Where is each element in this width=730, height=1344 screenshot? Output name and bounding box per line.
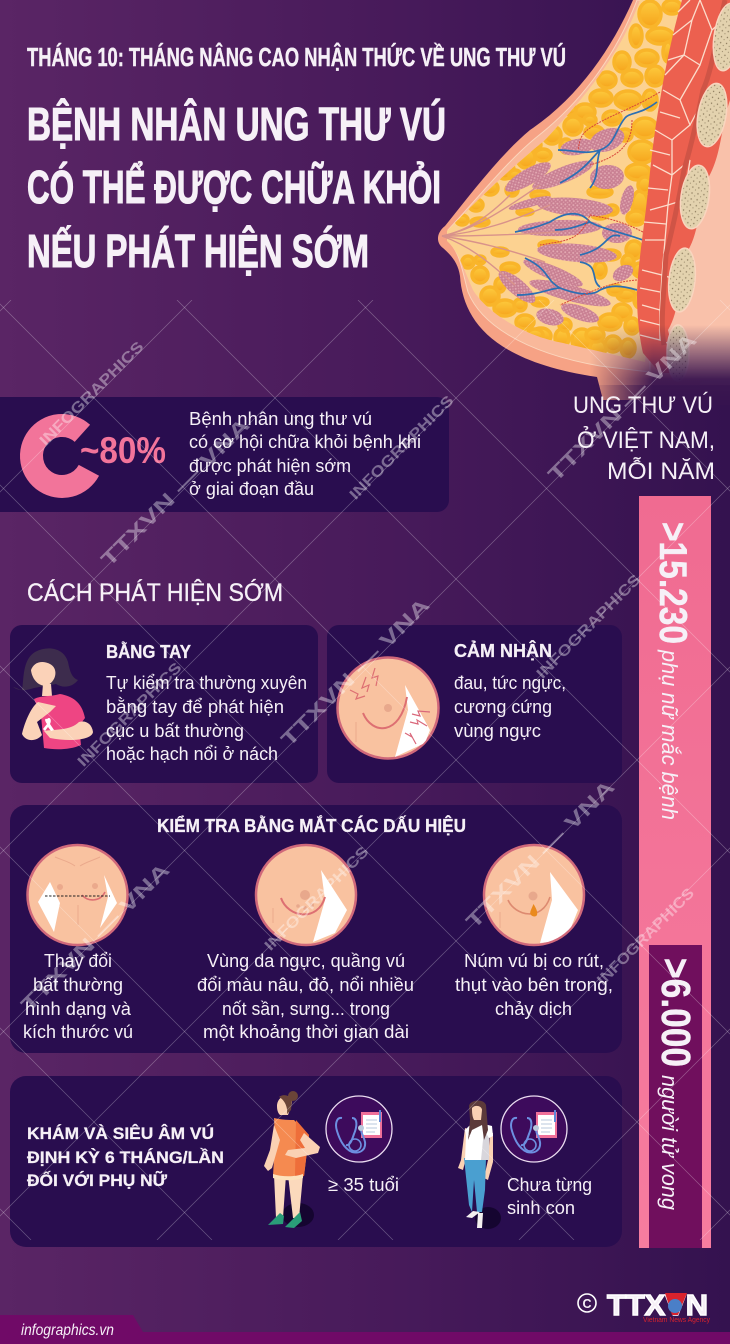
text: screening advice: ĐỐI VỚI PHỤ NỮ bbox=[27, 1170, 168, 1190]
text: screening advice: ĐỊNH KỲ 6 THÁNG/LẦN bbox=[27, 1148, 224, 1167]
chest muscle bbox=[637, 0, 730, 373]
heading: Vietnam each year bbox=[573, 392, 715, 485]
text: skin change: đổi màu nâu, đỏ, nổi nhiều bbox=[197, 974, 414, 995]
text: shape change: hình dạng và bbox=[25, 998, 132, 1019]
text: nipple change: thụt vào bên trong, bbox=[455, 974, 613, 995]
text: shape change: bất thường bbox=[33, 974, 123, 995]
panel: visual check bbox=[10, 805, 622, 1053]
icon: stethoscope and clipboard 1 bbox=[326, 1096, 392, 1162]
text: shape change bbox=[23, 950, 133, 1042]
text: skin change: Vùng da ngực, quầng vú bbox=[207, 950, 405, 971]
text: shape change: kích thước vú bbox=[23, 1021, 133, 1042]
text: never given birth bbox=[507, 1174, 592, 1218]
text: by hand description: hoặc hạch nổi ở nách bbox=[106, 743, 278, 764]
text: by hand description: Tự kiểm tra thường xuyên bbox=[106, 672, 307, 693]
text: screening advice bbox=[27, 1124, 224, 1190]
panel: self exam bbox=[10, 625, 318, 783]
text: skin change bbox=[197, 950, 414, 1042]
icon: nipple discharge bbox=[484, 845, 584, 945]
milk ducts bbox=[442, 185, 560, 285]
text: skin change: một khoảng thời gian dài bbox=[203, 1021, 409, 1042]
stat: 15230 women bbox=[651, 522, 694, 820]
title: CÓ THỂ ĐƯỢC CHỮA KHỎI bbox=[27, 161, 441, 213]
text: feeling description: cương cứng bbox=[454, 696, 552, 717]
text: nipple change: chảy dịch bbox=[495, 998, 572, 1019]
stat: 15230 women: phụ nữ mắc bệnh bbox=[657, 649, 682, 820]
fade to background bbox=[590, 325, 730, 400]
text: 80 percent description: có cơ hội chữa khỏi bệnh khi bbox=[189, 431, 421, 452]
text: shape change: Thay đổi bbox=[44, 950, 112, 971]
icon: stethoscope and clipboard 2 bbox=[501, 1096, 567, 1162]
blood vessels bbox=[515, 102, 657, 295]
title: NẾU PHÁT HIỆN SỚM bbox=[27, 225, 369, 277]
watermark: TTXVN VNA: TTXVN — VNA bbox=[97, 414, 254, 571]
text: never given birth: sinh con bbox=[507, 1197, 575, 1218]
text: 80 percent description: Bệnh nhân ung thư vú bbox=[189, 408, 372, 429]
watermark: infographics: INFOGRAPHICS bbox=[533, 571, 644, 682]
illustration: breast anatomy bbox=[438, 0, 730, 405]
watermark: TTXVN VNA: TTXVN — VNA bbox=[17, 859, 174, 1016]
heading: by hand: BẰNG TAY bbox=[106, 641, 191, 662]
title: BỆNH NHÂN UNG THƯ VÚ bbox=[27, 98, 446, 150]
panel: 80 percent bbox=[0, 397, 449, 512]
fat lobules bbox=[456, 0, 681, 357]
stat: 6000 deaths: người tử vong bbox=[657, 1075, 682, 1211]
watermark: infographics bbox=[36, 338, 698, 989]
text: never given birth: Chưa từng bbox=[507, 1174, 592, 1195]
text: feeling description: đau, tức ngực, bbox=[454, 672, 566, 693]
stat: 15230 women: >15.230 bbox=[651, 522, 694, 644]
panel: feeling bbox=[327, 625, 622, 783]
text: screening advice: KHÁM VÀ SIÊU ÂM VÚ bbox=[27, 1124, 214, 1143]
glandular lobes bbox=[494, 124, 637, 328]
watermark: TTXVN VNA bbox=[17, 329, 701, 1016]
heading: Vietnam each year: Ở VIỆT NAM, bbox=[577, 425, 715, 454]
watermark: infographics: INFOGRAPHICS bbox=[261, 843, 372, 954]
text: by hand description: cục u bất thường bbox=[106, 720, 244, 741]
footer band bbox=[0, 1315, 730, 1344]
text: by hand description: bằng tay để phát hiện bbox=[106, 696, 284, 717]
text: 80 percent description: được phát hiện sớm bbox=[189, 455, 351, 476]
logo: TTXVN: Vietnam News Agency bbox=[643, 1315, 710, 1324]
panel: screening bbox=[10, 1076, 622, 1247]
text: skin change: nốt sần, sưng... trong bbox=[222, 998, 390, 1019]
figure: woman in orange dress bbox=[264, 1091, 320, 1228]
text: feeling description bbox=[454, 672, 566, 741]
title bbox=[27, 98, 446, 277]
watermark: TTXVN VNA: TTXVN — VNA bbox=[277, 594, 434, 751]
watermark: TTXVN VNA: TTXVN — VNA bbox=[462, 776, 619, 933]
heading: Vietnam each year: UNG THƯ VÚ bbox=[573, 392, 713, 419]
heading: early detection: CÁCH PHÁT HIỆN SỚM bbox=[27, 578, 283, 607]
watermark: infographics: INFOGRAPHICS bbox=[346, 392, 457, 503]
icon: breast with pain marks bbox=[338, 658, 438, 758]
text: 80 percent description bbox=[189, 408, 421, 499]
icon: shape change bbox=[28, 845, 128, 945]
stat: 80 percent: ~80% bbox=[80, 430, 166, 471]
stat: 6000 deaths bbox=[653, 958, 699, 1211]
icon: woman with ribbon bbox=[13, 648, 93, 749]
heading: feeling: CẢM NHẬN bbox=[454, 640, 552, 661]
text: nipple change bbox=[455, 950, 613, 1019]
watermark: infographics: INFOGRAPHICS bbox=[74, 659, 185, 770]
heading: visual check: KIỂM TRA BẰNG MẮT CÁC DẤU HIỆU bbox=[157, 815, 466, 836]
bar: cases per year bbox=[639, 496, 711, 1248]
text: age 35: ≥ 35 tuổi bbox=[328, 1174, 399, 1195]
watermark: infographics: INFOGRAPHICS bbox=[594, 885, 698, 989]
icon: pie ring bbox=[31, 425, 89, 486]
icon: skin change bbox=[256, 845, 356, 945]
logo: TTXVN bbox=[578, 1290, 710, 1324]
logo: TTXVN: TTXVN bbox=[607, 1290, 708, 1322]
stat: 6000 deaths: >6.000 bbox=[653, 958, 699, 1067]
text: 80 percent description: ở giai đoạn đầu bbox=[189, 478, 314, 499]
text: feeling description: vùng ngực bbox=[454, 720, 541, 741]
ribs and intercostal band bbox=[662, 0, 730, 381]
website label: infographics.vn bbox=[21, 1322, 114, 1339]
logo: TTXVN: C bbox=[582, 1296, 592, 1311]
bar: deaths per year bbox=[649, 945, 702, 1248]
text: by hand description bbox=[106, 672, 307, 764]
heading: Vietnam each year: MỖI NĂM bbox=[607, 456, 715, 485]
watermark: infographics: INFOGRAPHICS bbox=[36, 338, 147, 449]
text: nipple change: Núm vú bị co rút, bbox=[464, 950, 604, 971]
watermark: TTXVN VNA: TTXVN — VNA bbox=[544, 329, 701, 486]
figure: woman in jeans bbox=[458, 1101, 501, 1229]
